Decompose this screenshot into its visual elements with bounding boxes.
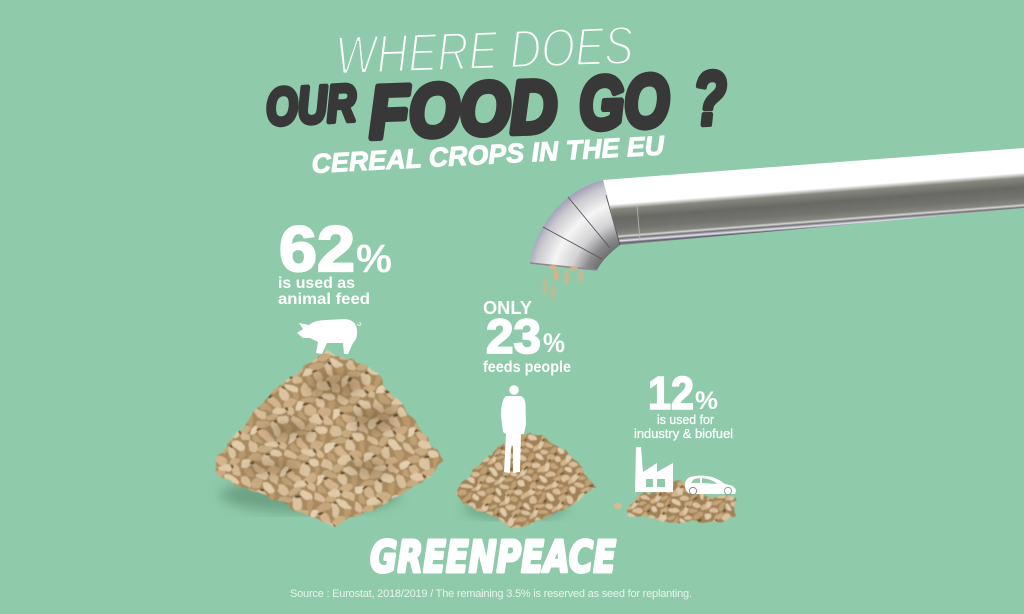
stat: 62%: % bbox=[356, 237, 392, 281]
stat: 23%: 23 bbox=[486, 311, 541, 364]
shadow bbox=[220, 477, 400, 513]
label: industry and biofuel: industry & biofuel bbox=[634, 426, 733, 441]
shadow bbox=[463, 497, 567, 519]
stat: 62%: 62 bbox=[279, 213, 355, 285]
pipe bbox=[530, 148, 1024, 300]
pig icon bbox=[297, 319, 361, 354]
stat: 23% bbox=[483, 298, 571, 376]
stat: 12%: 12 bbox=[648, 367, 694, 419]
title line: where does: WHERE DOES bbox=[334, 16, 634, 86]
stat: 62% bbox=[278, 213, 392, 308]
grain pile medium bbox=[456, 433, 594, 527]
panel: animal feed 62% bbox=[216, 213, 444, 526]
car icon bbox=[685, 476, 736, 495]
pipe: straight section bbox=[603, 148, 1024, 245]
grain pile large bbox=[216, 352, 444, 526]
label: feeds people: feeds people bbox=[483, 359, 571, 376]
title line: our food go: FOOD bbox=[368, 64, 558, 154]
label: industry and biofuel: is used for bbox=[657, 412, 715, 427]
pipe: elbow bbox=[530, 180, 620, 270]
source note: Source : Eurostat, 2018/2019 / The remaining 3.5% is reserved as seed for replanting. bbox=[290, 588, 692, 600]
stat: 12% bbox=[634, 367, 733, 441]
title line: our food go: ? bbox=[692, 56, 729, 142]
label: animal feed: animal feed bbox=[278, 291, 370, 308]
factory icon bbox=[635, 447, 673, 492]
title line: our food go: OUR bbox=[265, 74, 358, 137]
stat: 23%: % bbox=[543, 328, 565, 358]
label: only: ONLY bbox=[483, 298, 532, 318]
stat: 12%: % bbox=[695, 387, 718, 415]
logo: greenpeace: GREENPEACE bbox=[370, 532, 616, 583]
panel: feeds people 23% bbox=[456, 298, 594, 527]
falling grains bbox=[543, 265, 583, 300]
title bbox=[265, 16, 729, 179]
panel: industry and biofuel 12% bbox=[614, 367, 736, 525]
title line: our food go bbox=[265, 56, 729, 154]
person icon bbox=[501, 385, 526, 473]
grain pile small bbox=[628, 480, 736, 525]
subtitle: CEREAL CROPS IN THE EU bbox=[311, 130, 666, 179]
title line: our food go: GO bbox=[578, 59, 671, 145]
label: animal feed: is used as bbox=[278, 275, 355, 292]
